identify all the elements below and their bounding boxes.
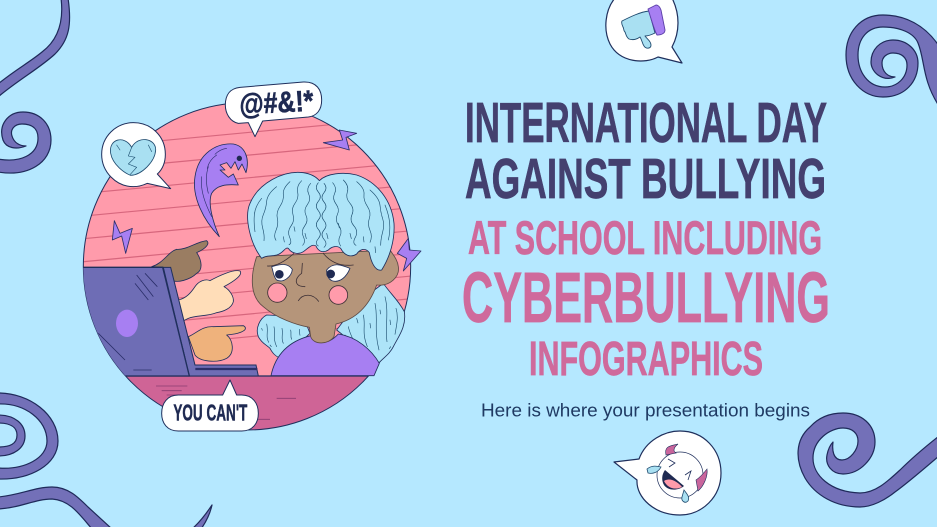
wall lines [84,124,410,343]
speech bubble: you can't [162,380,258,431]
icon: laughing devil speech bubble [614,431,721,515]
title line 5: INFOGRAPHICS [529,333,763,386]
speech bubble: you can't: YOU CAN'T [173,400,247,426]
back hair left [257,315,310,358]
hand: brown [152,241,208,281]
swirl: left spiral [0,112,51,173]
back hair strands [262,297,397,350]
speech bubble: broken heart [102,123,171,189]
cheeks [268,283,348,304]
hair top [248,172,394,270]
back hair right [337,283,405,363]
title [462,91,830,386]
hand: orange [188,326,245,361]
desk [126,375,368,430]
illustration: bullied girl in circle [82,82,422,432]
swirl: bottom left spiral [0,393,58,479]
laptop [80,267,258,376]
face [252,250,399,343]
ghost monster [194,144,247,237]
swirl: bottom tip [192,505,212,527]
lightning bolt: left [112,221,132,253]
lightning bolt: top right [323,130,357,150]
hand: light [178,271,241,322]
circle outline [83,103,411,430]
speech bubble: curse symbols: @#&!* [239,85,315,121]
hair strands [254,180,390,253]
swirl: top right spiral [846,15,937,106]
subtitle: Here is where your presentation begins [481,400,810,420]
nose and mouth [296,263,319,301]
swirl: top left wave [0,0,70,97]
swirl: bottom right spiral [798,413,937,507]
swirl: bottom left wave [0,487,112,527]
shirt [271,334,379,376]
pink wall circle [83,103,411,430]
eyes [267,253,353,281]
lightning bolt: right [397,238,421,271]
icon: thumbs-down speech bubble [606,0,682,63]
speech bubble: curse symbols [225,82,322,137]
